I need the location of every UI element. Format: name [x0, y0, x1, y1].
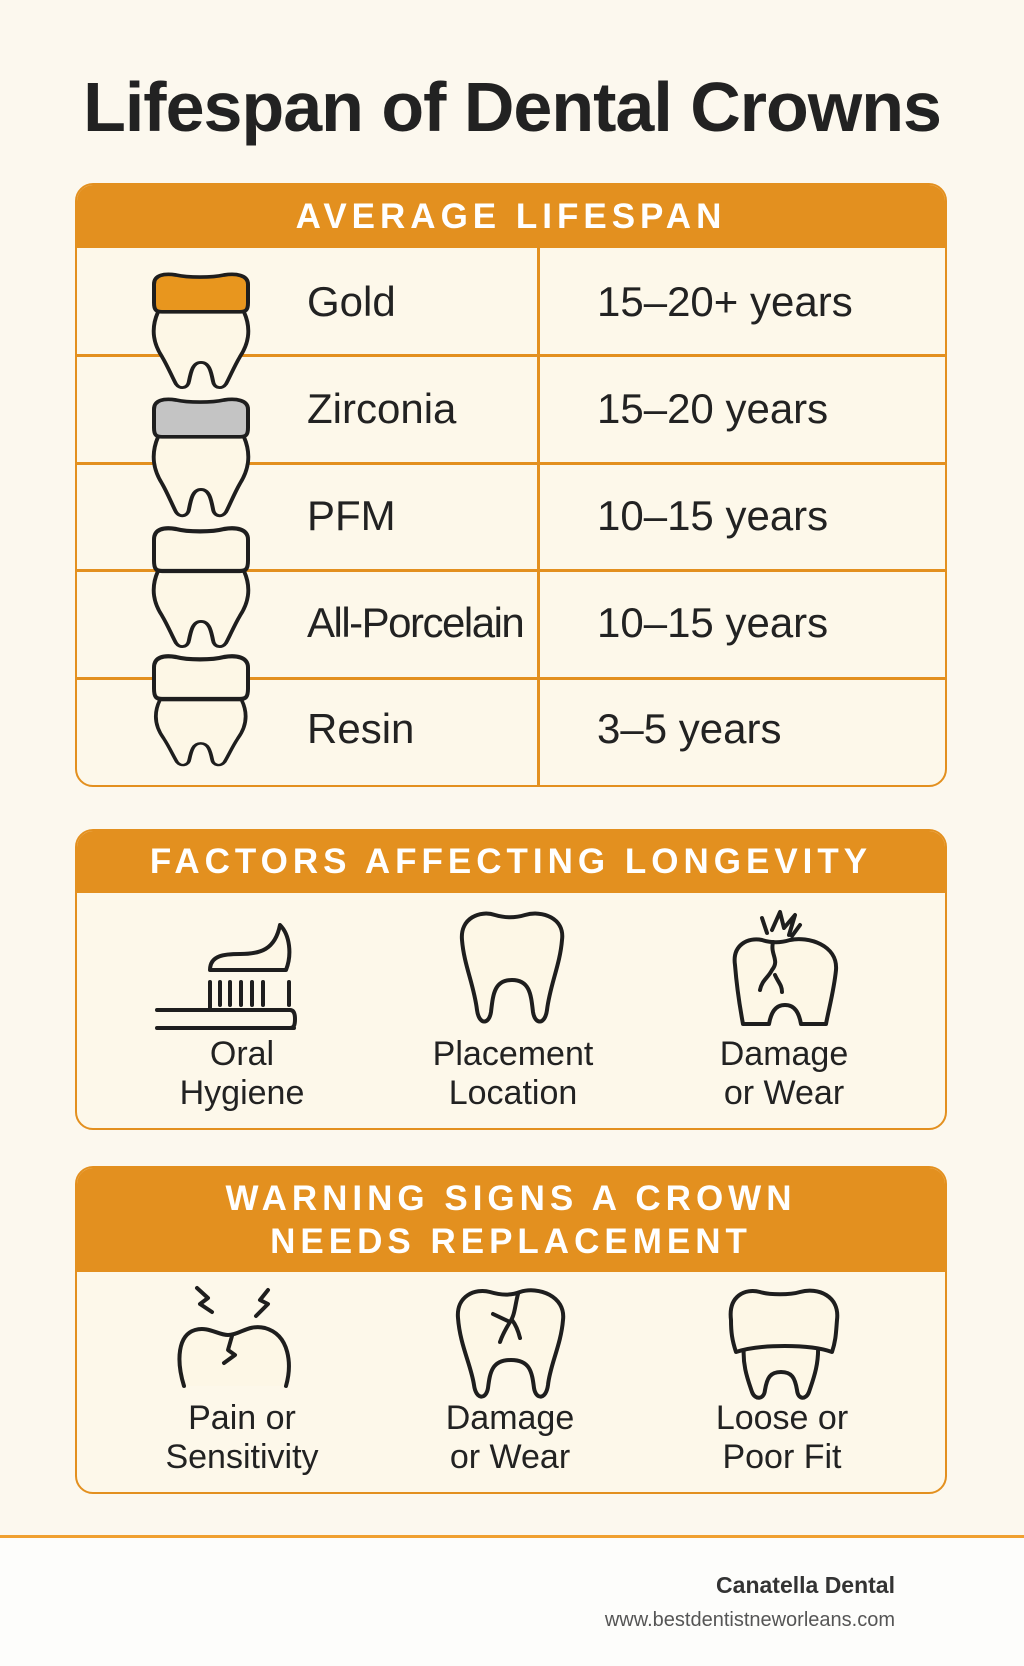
- label: placement location: [433, 1035, 594, 1112]
- header: average lifespan: AVERAGE LIFESPAN: [296, 197, 726, 236]
- label: oral hygiene: Hygiene: [180, 1074, 304, 1112]
- panel: warning signs: [75, 1166, 947, 1494]
- label: pain or sensitivity: Pain or: [188, 1399, 296, 1437]
- label: pain or sensitivity: Sensitivity: [165, 1438, 319, 1476]
- footer: url: www.bestdentistneworleans.com: [605, 1609, 895, 1631]
- label: placement location: Location: [449, 1074, 577, 1112]
- tooth: pfm: [154, 571, 248, 647]
- tooth: resin: [156, 700, 246, 765]
- row: zirconia: [307, 385, 828, 432]
- header: warning signs: WARNING SIGNS A CROWN: [225, 1179, 796, 1218]
- tooth: gold: [154, 312, 248, 388]
- label: damage or wear: or Wear: [724, 1074, 844, 1112]
- row: zirconia: 15–20 years: [597, 385, 828, 432]
- row: gold: [307, 278, 853, 325]
- icon: tooth: [462, 914, 562, 1022]
- label: placement location: Placement: [433, 1035, 593, 1073]
- row: pfm: 10–15 years: [597, 492, 828, 539]
- header: factors: FACTORS AFFECTING LONGEVITY: [150, 842, 872, 881]
- footer divider: [0, 1535, 1024, 1538]
- label: loose or poor fit: Loose or: [716, 1399, 848, 1437]
- label: oral hygiene: Oral: [210, 1035, 274, 1073]
- icons: factors: [155, 910, 838, 1030]
- row: gold: Gold: [307, 278, 396, 325]
- label: damage or wear: [446, 1399, 574, 1476]
- header: warning signs: [77, 1168, 945, 1272]
- tooth: zirconia: [154, 437, 248, 516]
- icon: pain tooth: [179, 1288, 289, 1386]
- label: pain or sensitivity: [165, 1399, 319, 1476]
- row: zirconia: Zirconia: [307, 385, 456, 432]
- row: pfm: [307, 492, 828, 539]
- row: gold: 15–20+ years: [597, 278, 853, 325]
- row: all-porcelain: All-Porcelain: [307, 599, 523, 646]
- label: loose or poor fit: [716, 1399, 848, 1476]
- icon: cracked tooth: [458, 1290, 563, 1397]
- panel: average lifespan: [75, 183, 947, 787]
- header: warning signs: NEEDS REPLACEMENT: [270, 1222, 752, 1261]
- row: pfm: PFM: [307, 492, 396, 539]
- label: damage or wear: [720, 1035, 848, 1112]
- label: oral hygiene: [180, 1035, 304, 1112]
- icons: warning signs: [177, 1286, 840, 1400]
- icon: damaged tooth: [735, 912, 836, 1024]
- row: all-porcelain: [307, 599, 828, 646]
- row: all-porcelain: 10–15 years: [597, 599, 828, 646]
- label: damage or wear: or Wear: [450, 1438, 570, 1476]
- icons: crown teeth: [152, 272, 250, 766]
- icon: loose crown: [731, 1291, 837, 1398]
- panel: factors affecting longevity: [75, 829, 947, 1130]
- row: resin: Resin: [307, 705, 414, 752]
- title: Lifespan of Dental Crowns: [83, 68, 941, 146]
- footer: brand: Canatella Dental: [716, 1572, 895, 1598]
- row: resin: 3–5 years: [597, 705, 781, 752]
- label: damage or wear: Damage: [446, 1399, 574, 1437]
- header: average lifespan: [77, 185, 945, 248]
- label: damage or wear: Damage: [720, 1035, 848, 1073]
- label: loose or poor fit: Poor Fit: [722, 1438, 842, 1476]
- row: resin: [307, 705, 781, 752]
- icon: toothbrush: [157, 925, 295, 1028]
- header: factors: [77, 831, 945, 893]
